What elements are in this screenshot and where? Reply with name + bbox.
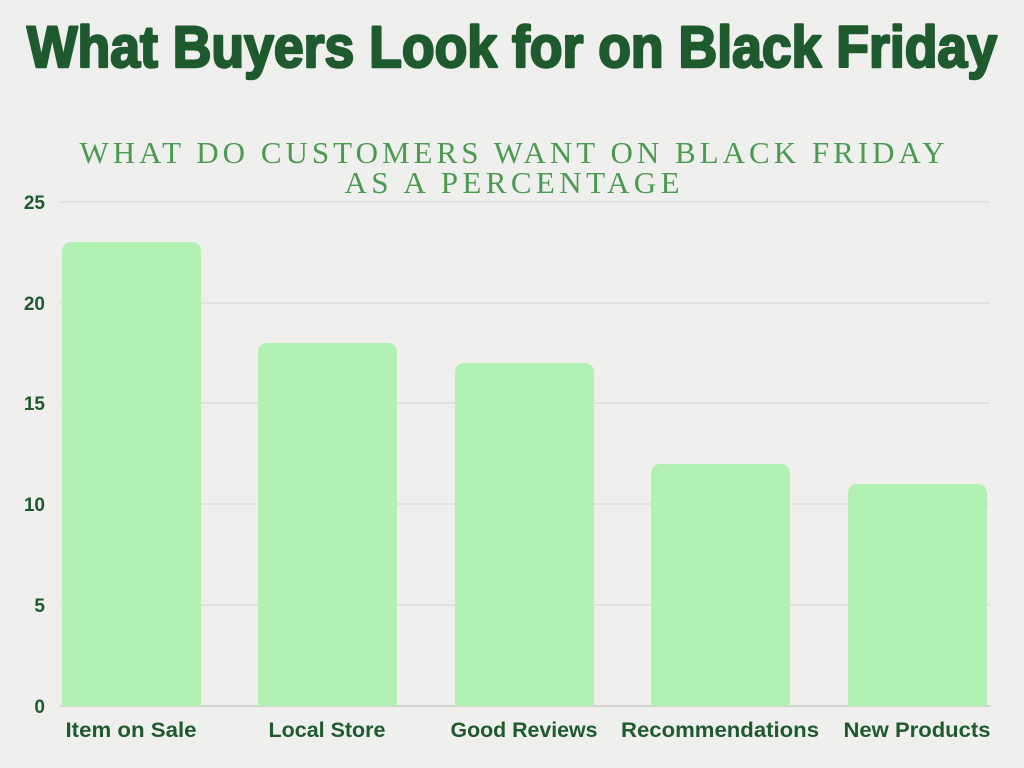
- x axis labels: Recommendations: [621, 719, 819, 742]
- x axis labels: Item on Sale: [66, 719, 196, 742]
- x axis labels: New Products: [844, 719, 990, 742]
- subtitle: [80, 135, 944, 200]
- x axis labels: [66, 719, 990, 742]
- subtitle: WHAT DO CUSTOMERS WANT ON BLACK FRIDAY: [80, 135, 944, 170]
- bar chart: [24, 193, 990, 742]
- bars: [62, 242, 987, 706]
- y axis labels: 15: [24, 394, 45, 415]
- y axis labels: 5: [34, 596, 45, 617]
- y axis labels: 25: [24, 193, 45, 214]
- y axis labels: 20: [24, 294, 45, 315]
- x axis labels: Good Reviews: [450, 719, 598, 742]
- subtitle: AS A PERCENTAGE: [344, 165, 680, 200]
- y axis labels: 10: [24, 495, 45, 516]
- x axis labels: Local Store: [268, 719, 386, 742]
- y axis labels: [24, 193, 45, 718]
- y axis labels: 0: [34, 697, 45, 718]
